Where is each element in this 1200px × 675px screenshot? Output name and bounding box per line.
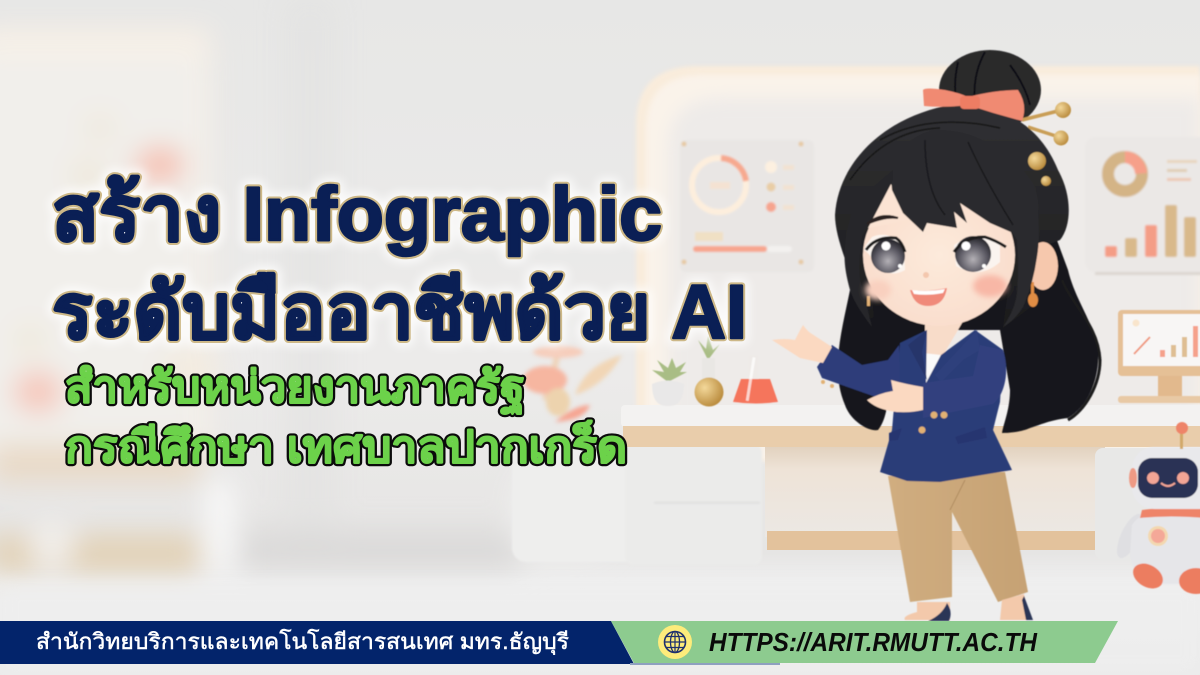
website url: HTTPS://ARIT.RMUTT.AC.TH <box>709 627 1038 657</box>
navy blazer <box>817 330 1012 482</box>
left foot and shoe <box>904 602 951 621</box>
title text: ระดับมืออาชีพด้วย AI <box>52 270 747 355</box>
title outline <box>52 172 747 355</box>
right sleeve <box>923 345 1006 418</box>
subtitle text <box>65 363 627 472</box>
face <box>863 184 1015 326</box>
robot collar <box>1140 506 1200 518</box>
subtitle outline: สำหรับหน่วยงานภาครัฐ <box>65 363 525 415</box>
subtitle <box>65 363 627 472</box>
dashboard panel: pie and bar chart <box>1085 137 1200 275</box>
right lapel <box>935 330 980 382</box>
right eye <box>954 236 1006 272</box>
subtitle text: กรณีศึกษา เทศบาลปากเกร็ด <box>65 420 627 472</box>
shelf objects: plants and flask <box>652 336 778 406</box>
nose <box>923 272 929 278</box>
robot ear <box>1129 468 1137 488</box>
blush <box>865 275 1007 300</box>
left cabinet blocks <box>512 440 762 565</box>
robot body <box>1130 510 1200 584</box>
left sleeve <box>817 345 900 402</box>
footer underline <box>630 663 780 665</box>
right foot and shoe <box>1000 594 1033 620</box>
title text: สร้าง Infographic <box>52 172 662 257</box>
desk top <box>621 405 1200 427</box>
subtitle outline <box>65 363 627 472</box>
icon: globe <box>658 625 692 659</box>
main hair top <box>835 105 1069 328</box>
hair strands on the crown <box>850 122 1000 180</box>
baseboard <box>767 531 1097 550</box>
cabinets and desk <box>512 405 1200 565</box>
title outline: ระดับมืออาชีพด้วย AI <box>52 270 747 355</box>
robot arm <box>1112 510 1148 562</box>
left eye <box>864 235 905 274</box>
robot <box>1112 422 1200 594</box>
gold vase <box>694 336 724 406</box>
lower hand <box>867 380 923 412</box>
left lapel <box>908 330 927 380</box>
recess behind desk <box>765 447 1105 537</box>
title glow <box>52 172 747 355</box>
robot head <box>1132 447 1200 509</box>
title glow: สร้าง Infographic <box>52 172 662 257</box>
title heading <box>52 172 747 355</box>
white shirt and neck <box>925 318 965 385</box>
footer navy band <box>0 621 634 664</box>
robot antenna <box>1180 433 1183 449</box>
flask <box>733 356 778 404</box>
title text <box>52 172 747 355</box>
back hair <box>838 235 1098 433</box>
footer bar <box>0 621 1118 665</box>
desk wood edge <box>623 426 1200 447</box>
pants <box>888 472 1028 602</box>
robot face screen <box>1138 458 1198 498</box>
monitor with small chart <box>1118 310 1200 403</box>
white pot plant <box>652 358 687 406</box>
robot chest button <box>1148 526 1168 546</box>
robot feet <box>1129 558 1167 594</box>
left strand <box>845 170 893 327</box>
back wall glowing panel <box>636 66 1200 460</box>
loose strand right <box>1062 280 1100 420</box>
earrings <box>867 282 1038 307</box>
mouth <box>910 288 947 306</box>
title glow: ระดับมืออาชีพด้วย AI <box>52 270 747 355</box>
footer green band <box>611 621 1118 663</box>
subtitle outline: กรณีศึกษา เทศบาลปากเกร็ด <box>65 420 627 472</box>
organisation name: สำนักวิทยบริการและเทคโนโลยีสารสนเทศ มทร.ธัญบุรี <box>36 629 569 655</box>
right cabinet <box>1095 448 1170 560</box>
character <box>772 50 1100 621</box>
pointing hand <box>772 325 832 363</box>
bangs <box>845 130 1039 327</box>
forehead <box>868 184 910 228</box>
subtitle text: สำหรับหน่วยงานภาครัฐ <box>65 363 525 415</box>
hair bun <box>939 50 1041 130</box>
dashboard panel: donut gauge <box>680 140 814 272</box>
brooch <box>1028 152 1051 186</box>
bow <box>923 88 1024 121</box>
ear <box>1028 242 1058 290</box>
pockets <box>955 427 987 444</box>
sleeve buttons and front button <box>821 380 948 434</box>
bang lines <box>925 140 1013 225</box>
title outline: สร้าง Infographic <box>52 172 662 257</box>
hair pins <box>1022 102 1071 146</box>
eyebrow <box>867 216 898 224</box>
blurred plant <box>523 345 622 422</box>
